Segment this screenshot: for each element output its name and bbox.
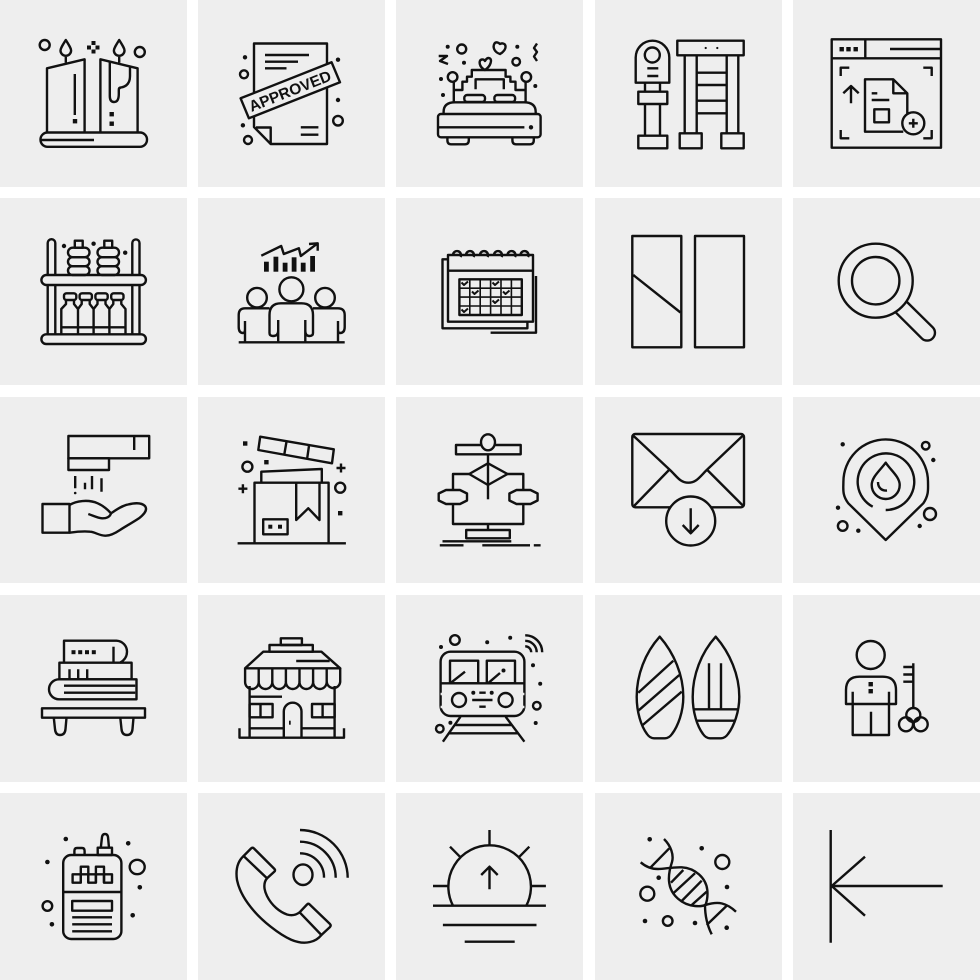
icon: bed with hearts	[438, 42, 541, 144]
panel: bed	[396, 0, 583, 187]
icon: two panels	[632, 236, 744, 347]
icon: shelf with bottles	[41, 239, 146, 344]
icon: approved document	[240, 44, 343, 144]
panel: arrow	[793, 793, 980, 980]
icon: bus stop and table	[636, 41, 744, 148]
panel: package	[198, 397, 385, 583]
icon: magnifying glass	[839, 244, 935, 341]
panel: envelope	[595, 397, 782, 583]
icon: water drop location pin	[836, 439, 936, 540]
panel: faucet	[0, 397, 187, 583]
panel: window panes	[595, 198, 782, 385]
panel: sunrise	[396, 793, 583, 980]
panel: shop	[198, 595, 385, 782]
icon: taxi radio	[43, 834, 145, 939]
panel: dna	[595, 793, 782, 980]
panel: approved document	[198, 0, 385, 187]
icon: box with clapper lid	[238, 437, 346, 543]
panel: shelf	[0, 198, 187, 385]
panel: person with key	[793, 595, 980, 782]
icon: person with key	[846, 641, 928, 735]
panel: flowchart	[396, 397, 583, 583]
panel: surfboards	[595, 595, 782, 782]
panel: phone call	[198, 793, 385, 980]
icon: sunrise	[433, 830, 546, 942]
panel: team growth	[198, 198, 385, 385]
panel: browser upload	[793, 0, 980, 187]
icon: train	[436, 635, 542, 742]
icon: shop storefront	[240, 638, 344, 738]
icon: team with growth chart	[239, 243, 345, 342]
icon: envelope with download	[632, 434, 744, 546]
icon: books on table	[42, 641, 145, 735]
panel: radio	[0, 793, 187, 980]
icon: calendar	[442, 251, 536, 333]
icon: dna	[640, 837, 736, 934]
icon: browser file upload	[832, 39, 941, 148]
icon: left arrow to bar	[831, 830, 943, 943]
panel: bus stop and table	[595, 0, 782, 187]
panel: candles	[0, 0, 187, 187]
icon: surfboards	[637, 637, 739, 738]
icon: approved document: APPROVED	[247, 68, 334, 116]
icon: phone with signal	[236, 830, 348, 943]
panel: search	[793, 198, 980, 385]
panel: water location	[793, 397, 980, 583]
panel: calendar	[396, 198, 583, 385]
icon: flowchart on stand	[439, 434, 541, 545]
icon: candles	[40, 40, 147, 147]
icon: faucet and hand	[42, 436, 149, 536]
panel: books	[0, 595, 187, 782]
panel: train	[396, 595, 583, 782]
